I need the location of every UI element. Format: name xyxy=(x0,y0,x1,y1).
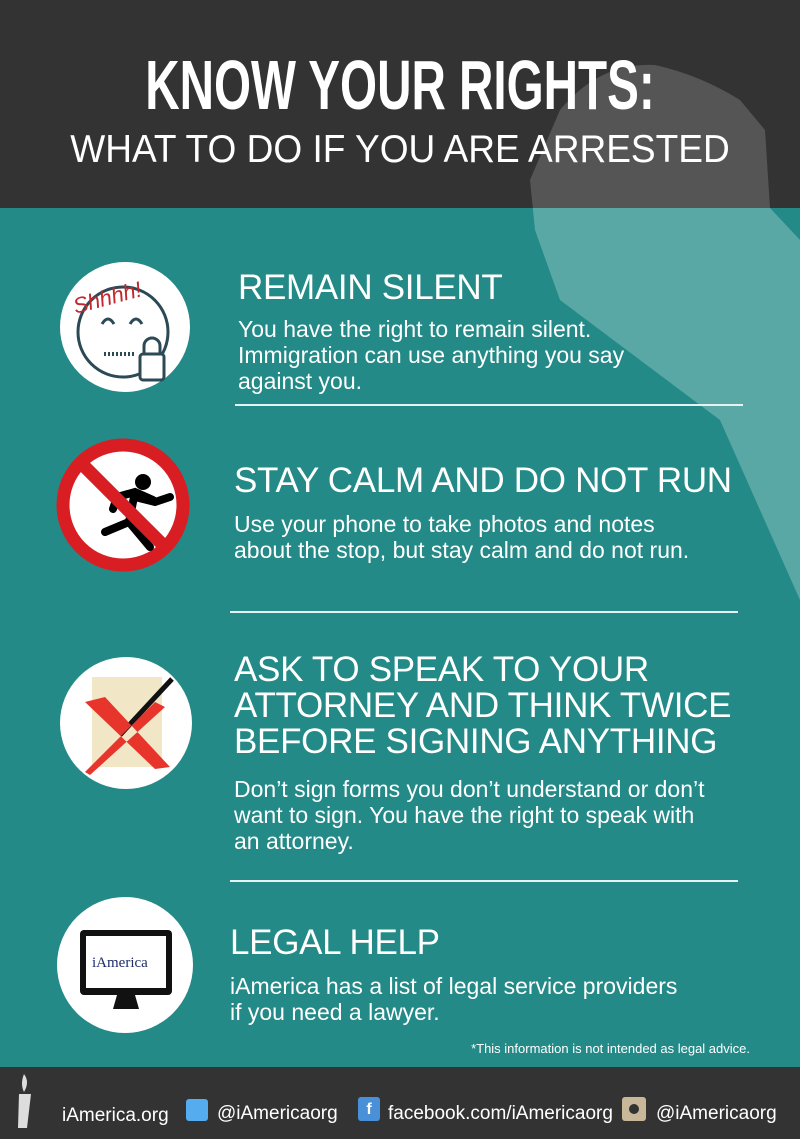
section 4: LEGAL HELP xyxy=(230,923,440,962)
icon: paper pen cross xyxy=(60,657,192,789)
section 1: against you. xyxy=(238,368,362,394)
section 3: Don’t sign forms you don’t understand or don’t xyxy=(234,776,704,802)
logo iAmerica xyxy=(18,1074,31,1128)
section 3: an attorney. xyxy=(234,828,354,854)
section 4: iAmerica has a list of legal service providers xyxy=(230,973,677,999)
footer: @iAmericaorg xyxy=(217,1103,338,1124)
icon: silent face xyxy=(60,262,190,392)
section 4 xyxy=(230,923,677,1025)
icon: silent face: Shhhh! xyxy=(70,277,144,319)
subtitle: WHAT TO DO IF YOU ARE ARRESTED xyxy=(70,128,730,171)
footer: @iAmericaorg xyxy=(656,1103,777,1124)
icon: monitor xyxy=(57,897,193,1033)
icon: monitor: iAmerica xyxy=(92,955,148,971)
section 1: You have the right to remain silent. xyxy=(238,316,591,342)
section 2: about the stop, but stay calm and do not run. xyxy=(234,537,689,563)
section 3 xyxy=(234,650,731,854)
footer: facebook.com/iAmericaorg xyxy=(388,1103,613,1124)
section 3: BEFORE SIGNING ANYTHING xyxy=(234,722,717,761)
section 2 xyxy=(234,461,732,563)
fist graphic xyxy=(530,65,800,600)
section 3: ATTORNEY AND THINK TWICE xyxy=(234,686,731,725)
facebook xyxy=(358,1097,380,1121)
twitter xyxy=(186,1099,208,1121)
section 1 xyxy=(238,268,624,394)
instagram xyxy=(622,1097,646,1121)
footer xyxy=(0,1067,800,1139)
section 2: Use your phone to take photos and notes xyxy=(234,511,655,537)
disclaimer: *This information is not intended as legal advice. xyxy=(471,1041,750,1056)
section 3: want to sign. You have the right to speak with xyxy=(234,802,694,828)
section 1: Immigration can use anything you say xyxy=(238,342,624,368)
section 4: if you need a lawyer. xyxy=(230,999,440,1025)
section 2: STAY CALM AND DO NOT RUN xyxy=(234,461,732,500)
footer: iAmerica.org xyxy=(62,1105,169,1126)
icon: no running xyxy=(56,438,190,572)
facebook: f xyxy=(366,1101,372,1118)
section 1: REMAIN SILENT xyxy=(238,268,502,307)
section 3: ASK TO SPEAK TO YOUR xyxy=(234,650,649,689)
title: KNOW YOUR RIGHTS: xyxy=(145,46,655,124)
header background xyxy=(0,0,800,208)
